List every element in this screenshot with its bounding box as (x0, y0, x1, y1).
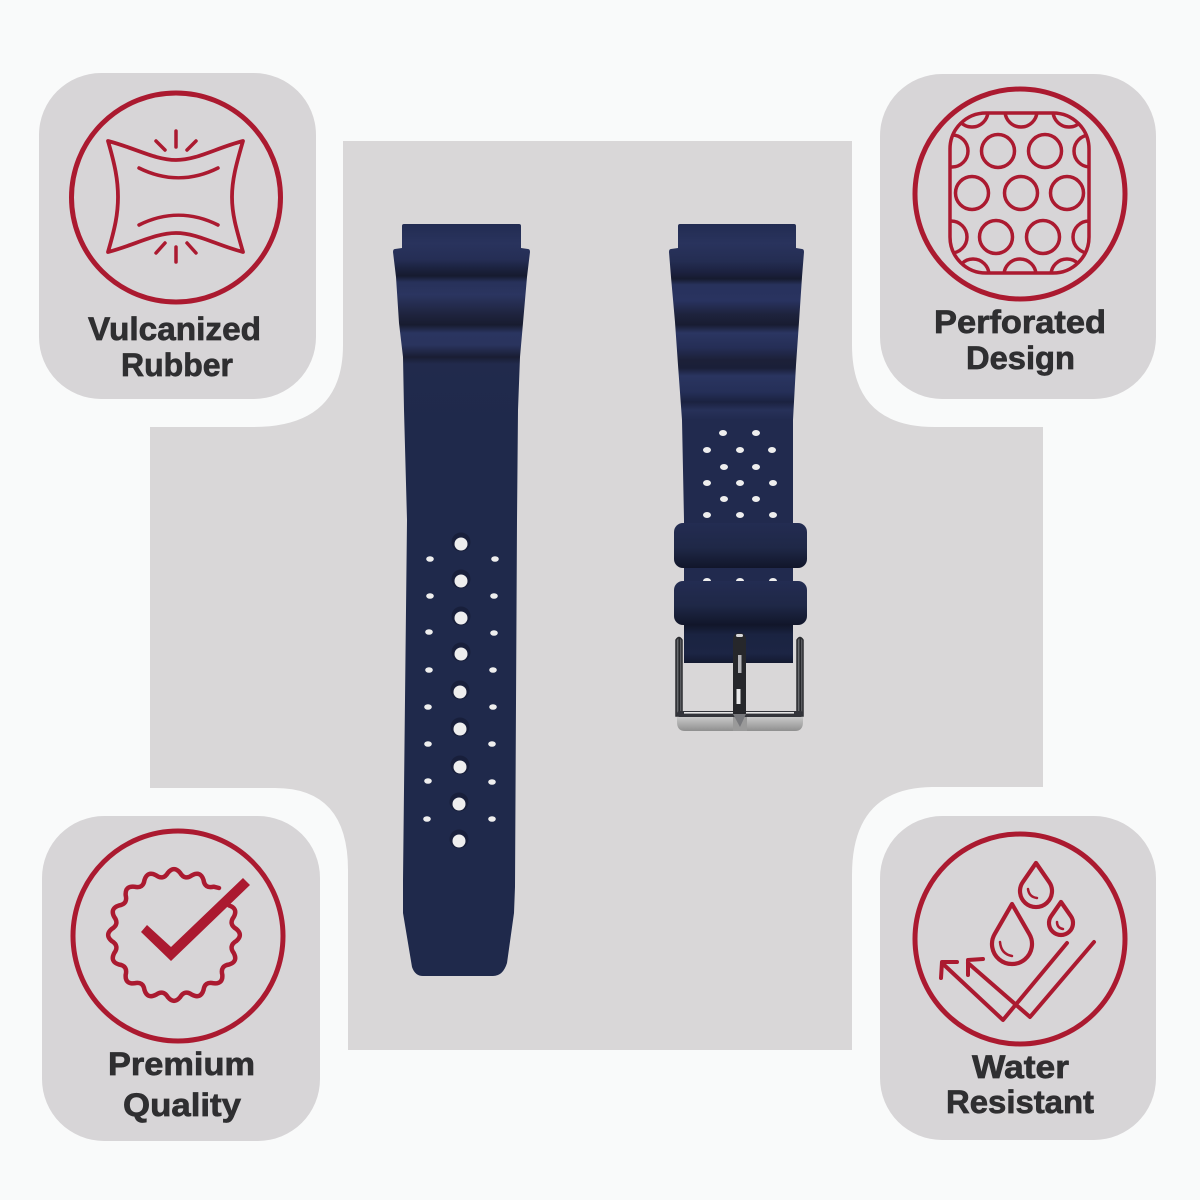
label: water resistant: Resistant (946, 1084, 1094, 1120)
label: perforated design (934, 304, 1106, 376)
strap body (669, 224, 804, 663)
large centre holes (450, 532, 470, 848)
label: premium quality: Premium (108, 1046, 255, 1082)
card: water resistant (880, 816, 1156, 1140)
icon: perforated pattern (915, 89, 1125, 299)
central gray backdrop panel (150, 141, 1043, 1050)
strap shaded lower part (684, 625, 793, 663)
label: perforated design: Perforated (934, 304, 1106, 340)
small holes (703, 430, 777, 584)
label: water resistant: Water (972, 1049, 1069, 1085)
label: vulcanized rubber: Rubber (121, 347, 233, 383)
icon: vulcanized rubber pillow (72, 93, 280, 302)
strap body (393, 224, 530, 976)
label: premium quality: Quality (123, 1087, 241, 1123)
card: premium quality (42, 816, 320, 1141)
icon: water drops and arrows (915, 834, 1125, 1044)
small side holes (423, 556, 499, 822)
label: vulcanized rubber: Vulcanized (88, 311, 261, 347)
buckle frame (676, 638, 803, 731)
card: vulcanized rubber (39, 73, 316, 399)
label: vulcanized rubber (88, 311, 261, 383)
buckle pin (733, 633, 746, 727)
label: premium quality (108, 1046, 255, 1123)
long watch strap piece (393, 224, 530, 976)
keeper loop lower (674, 581, 807, 625)
short watch strap piece with buckle (669, 224, 807, 731)
label: water resistant (946, 1049, 1094, 1120)
keeper loop upper (674, 523, 807, 568)
card: perforated design (880, 74, 1156, 399)
icon: quality badge with check (73, 831, 283, 1041)
label: perforated design: Design (966, 340, 1075, 376)
